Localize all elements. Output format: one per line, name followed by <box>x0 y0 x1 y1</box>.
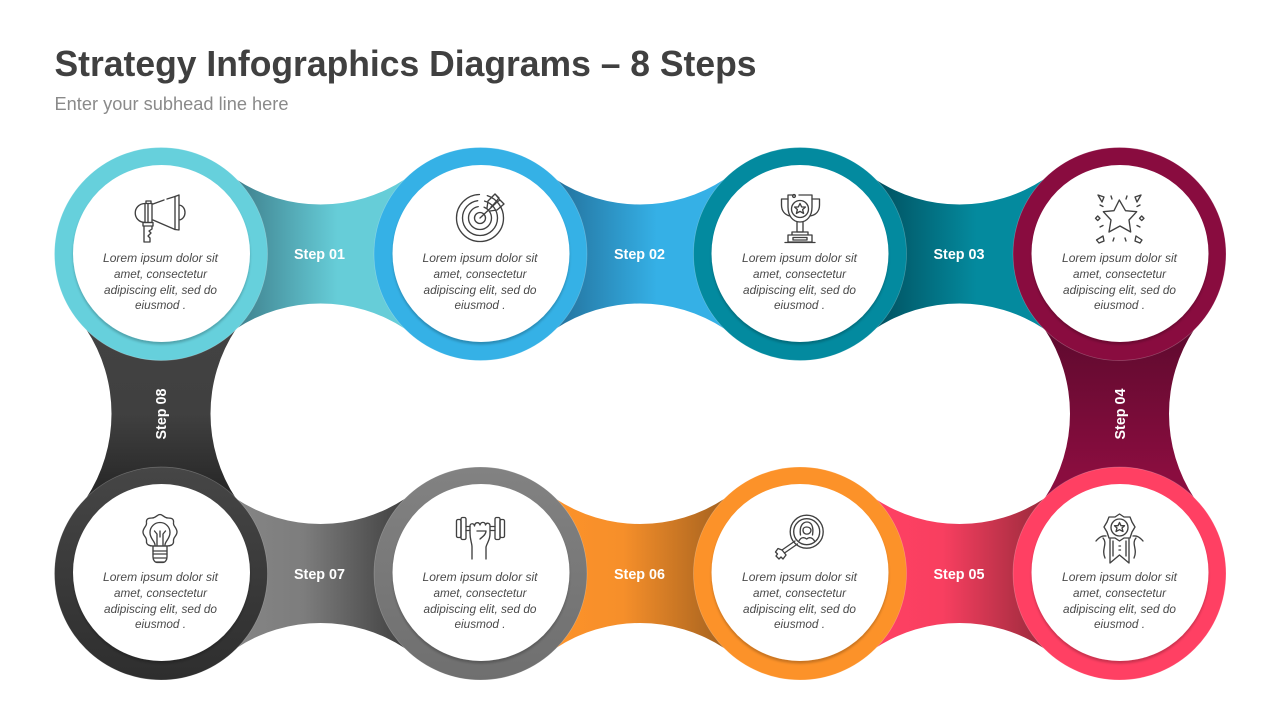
text: step 07 <box>422 570 538 631</box>
ring: step 01 <box>54 148 268 360</box>
label: step 02: Step 02 <box>614 247 665 263</box>
text: step 08 <box>103 570 219 631</box>
text: step 06: Lorem ipsum dolor sit <box>742 570 858 584</box>
connector: step 03 <box>875 179 1044 329</box>
connector: step 07 <box>236 498 405 648</box>
icon: megaphone <box>135 195 185 242</box>
text: step 08: Lorem ipsum dolor sit <box>103 570 219 584</box>
text: step 06: adipiscing elit, sed do <box>743 602 856 616</box>
text: step 03 <box>742 251 858 312</box>
text: step 01: adipiscing elit, sed do <box>104 283 217 297</box>
ring: step 05 <box>1013 467 1226 680</box>
text: step 05: adipiscing elit, sed do <box>1063 602 1176 616</box>
text: step 03: eiusmod . <box>774 298 825 312</box>
text: step 01: eiusmod . <box>135 298 186 312</box>
text: step 08: eiusmod . <box>135 617 186 631</box>
text: step 01 <box>103 251 219 312</box>
ring: step 02 <box>374 148 587 360</box>
text: step 03: adipiscing elit, sed do <box>743 283 856 297</box>
label: step 04: Step 04 <box>1113 388 1129 440</box>
text: step 07: amet, consectetur <box>434 586 527 600</box>
label: step 06: Step 06 <box>614 567 665 583</box>
white disc: step 02 <box>392 165 570 342</box>
text: step 02: Lorem ipsum dolor sit <box>422 251 538 265</box>
white disc: step 08 <box>73 484 250 661</box>
icon: medal <box>1096 514 1143 563</box>
white disc: step 07 <box>392 484 570 661</box>
label: step 03: Step 03 <box>934 247 984 263</box>
white disc: step 06 <box>712 484 888 661</box>
text: step 05: amet, consectetur <box>1073 586 1167 600</box>
icon: target <box>456 194 504 242</box>
text: step 02: adipiscing elit, sed do <box>424 283 537 297</box>
text: step 03: Lorem ipsum dolor sit <box>742 251 858 265</box>
label: step 08: Step 08 <box>154 388 170 440</box>
ring: step 07 <box>374 467 587 680</box>
icon: light bulb <box>143 514 177 562</box>
text: step 04: amet, consectetur <box>1073 267 1167 281</box>
text: step 06: amet, consectetur <box>753 586 847 600</box>
text: step 07: eiusmod . <box>454 617 506 631</box>
text: step 05: eiusmod . <box>1094 617 1145 631</box>
icon: dumbbell in fist <box>456 518 504 559</box>
text: step 04: adipiscing elit, sed do <box>1063 283 1176 297</box>
connector: step 08 <box>86 329 236 498</box>
ring: step 08 <box>54 467 268 680</box>
connector: step 06 <box>555 498 725 648</box>
text: step 02 <box>422 251 538 312</box>
text: step 02: eiusmod . <box>454 298 506 312</box>
text: step 03: amet, consectetur <box>753 267 847 281</box>
text: step 07: adipiscing elit, sed do <box>424 602 537 616</box>
ring: step 06 <box>694 467 906 680</box>
white disc: step 05 <box>1032 484 1208 661</box>
text: step 01: Lorem ipsum dolor sit <box>103 251 219 265</box>
icon: star burst <box>1096 195 1144 243</box>
connector: step 02 <box>555 179 725 329</box>
text: step 08: adipiscing elit, sed do <box>104 602 217 616</box>
ring: step 04 <box>1013 148 1226 360</box>
text: step 01: amet, consectetur <box>114 267 208 281</box>
text: step 07: Lorem ipsum dolor sit <box>422 570 538 584</box>
white disc: step 01 <box>73 165 250 342</box>
text: step 08: amet, consectetur <box>114 586 208 600</box>
ring: step 03 <box>694 148 906 360</box>
label: step 07: Step 07 <box>294 567 345 583</box>
label: step 05: Step 05 <box>934 567 984 583</box>
connector: step 01 <box>236 179 405 329</box>
label: step 01: Step 01 <box>294 247 345 263</box>
text: step 06 <box>742 570 858 631</box>
white disc: step 04 <box>1032 165 1208 342</box>
text: step 02: amet, consectetur <box>434 267 527 281</box>
text: step 04 <box>1062 251 1178 312</box>
text: step 04: eiusmod . <box>1094 298 1145 312</box>
text: step 06: eiusmod . <box>774 617 825 631</box>
text: step 05: Lorem ipsum dolor sit <box>1062 570 1178 584</box>
white disc: step 03 <box>712 165 888 342</box>
icon: trophy <box>782 195 820 242</box>
subtitle: Enter your subhead line here <box>54 94 288 114</box>
title: Strategy Infographics Diagrams – 8 Steps <box>54 43 756 84</box>
icon: key with person <box>776 515 823 559</box>
connector: step 04 <box>1044 329 1194 498</box>
text: step 04: Lorem ipsum dolor sit <box>1062 251 1178 265</box>
text: step 05 <box>1062 570 1178 631</box>
connector: step 05 <box>875 498 1044 648</box>
